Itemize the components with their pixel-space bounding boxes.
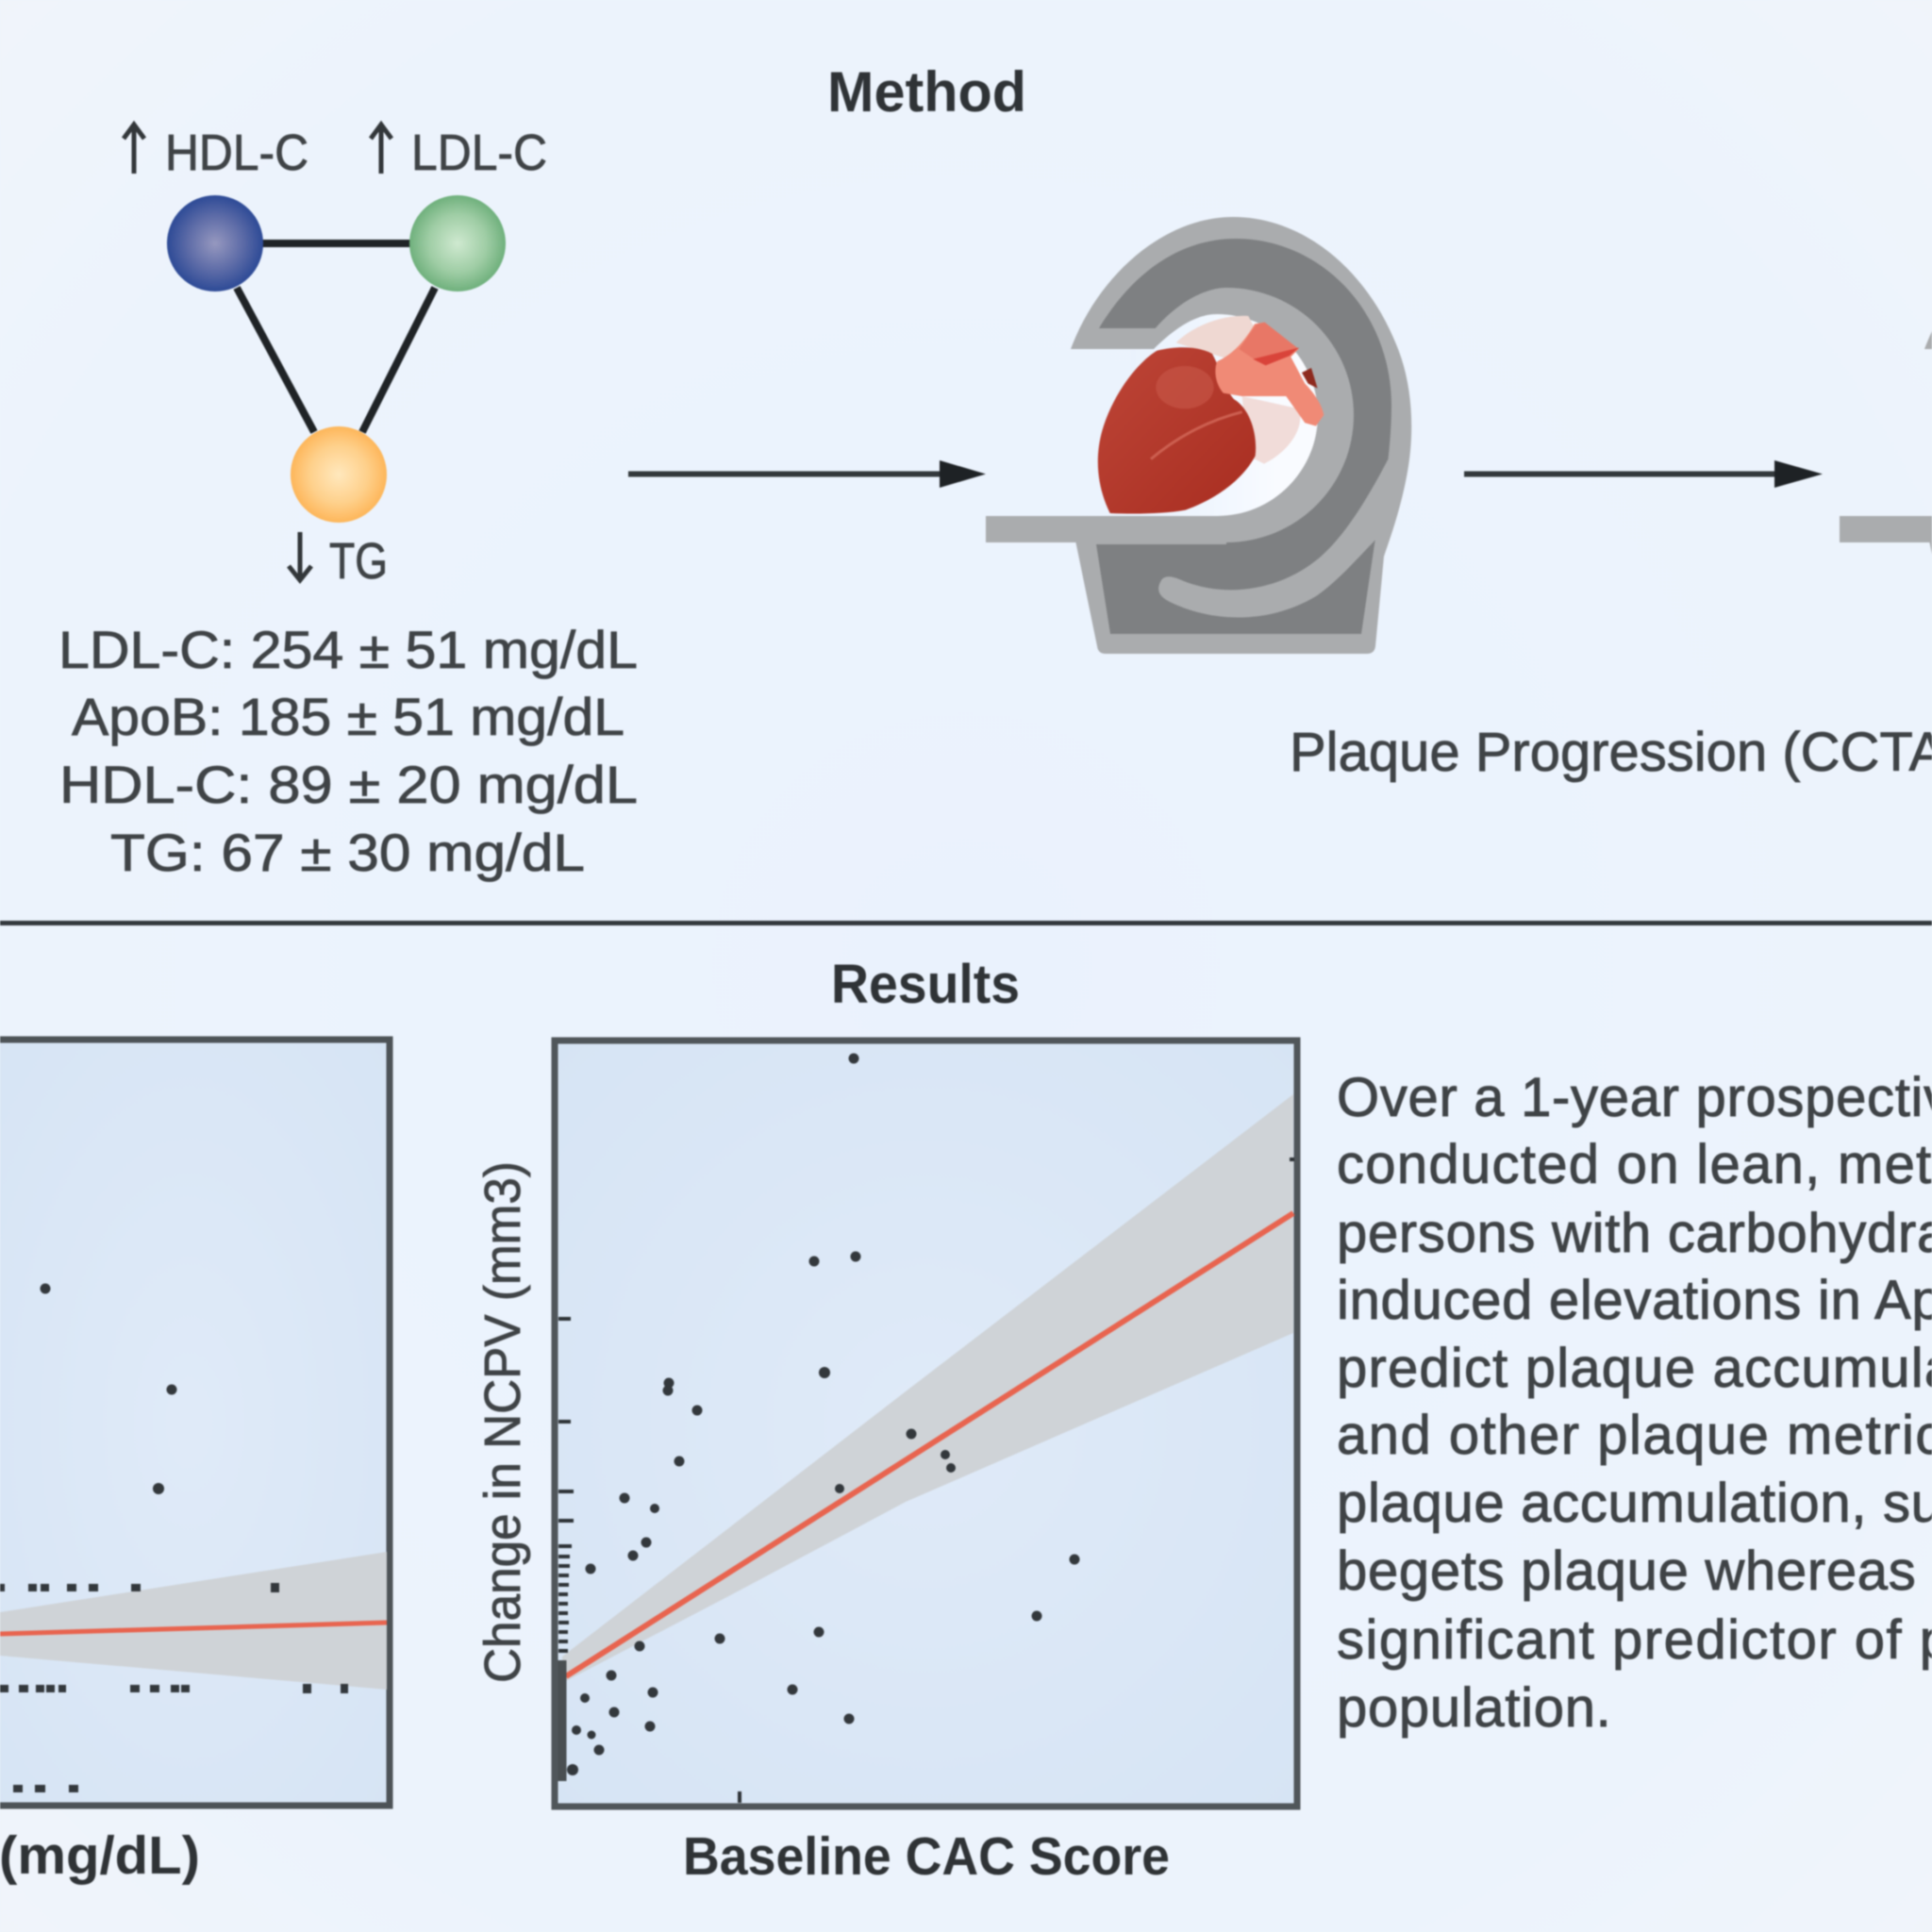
arrow: LDL-C up xyxy=(371,125,391,174)
baseline lipid values xyxy=(58,620,638,882)
value: TG: TG: 67 ± 30 mg/dL xyxy=(110,823,585,882)
sphere: TG xyxy=(291,426,387,523)
lipid triangle diagram xyxy=(124,125,547,590)
arrow: HDL-C up xyxy=(124,125,144,174)
label: TG: TG xyxy=(329,533,388,590)
panel: results xyxy=(0,954,1932,1887)
triangle connectors xyxy=(215,243,458,432)
regression line xyxy=(566,1213,1293,1676)
sphere: LDL-C xyxy=(409,195,506,291)
chart: plaque change versus baseline CAC score xyxy=(555,1041,1297,1807)
arrow: scan to follow-up xyxy=(1464,460,1823,488)
icon: CT scanner with heart xyxy=(986,217,1411,654)
label: HDL-C: HDL-C xyxy=(165,125,308,181)
dense points along axis xyxy=(558,1660,566,1781)
data points xyxy=(0,1283,348,1792)
heading: Method: Method xyxy=(827,60,1026,124)
value: LDL-C: LDL-C: 254 ± 51 mg/dL xyxy=(58,620,638,679)
plot area xyxy=(0,1040,390,1806)
arrow: lipids to scan xyxy=(628,460,986,488)
value: HDL-C: HDL-C: 89 ± 20 mg/dL xyxy=(59,755,638,814)
conclusion text xyxy=(1337,1067,1932,1739)
axis ticks xyxy=(558,1159,1294,1803)
axis label: change in NCPV: Change in NCPV (mm3) xyxy=(475,1161,531,1683)
icon: follow-up CT scanner, cropped at page edge xyxy=(1840,217,1932,654)
chart: plaque change versus ApoB, cropped at page edge xyxy=(0,1040,390,1806)
axis label: x of left chart: (mg/dL) xyxy=(0,1825,200,1886)
text line 10: population. xyxy=(1337,1677,1611,1739)
value: ApoB: ApoB: 185 ± 51 mg/dL xyxy=(72,687,625,746)
heart illustration xyxy=(1098,316,1324,514)
label: LDL-C: LDL-C xyxy=(411,125,547,181)
data points xyxy=(567,1053,1079,1775)
regression line xyxy=(0,1623,387,1634)
panel: method xyxy=(58,60,1932,882)
plot area xyxy=(555,1041,1297,1807)
arrow: TG down xyxy=(289,532,311,580)
text line 8: begets plaque whereas xyxy=(1337,1541,1916,1602)
heading: Results: Results xyxy=(831,954,1020,1015)
sphere: HDL-C xyxy=(167,195,263,291)
confidence band xyxy=(562,1094,1293,1683)
axis label: baseline CAC score: Baseline CAC Score xyxy=(683,1826,1170,1887)
confidence band xyxy=(0,1552,387,1690)
section divider xyxy=(0,921,1932,925)
